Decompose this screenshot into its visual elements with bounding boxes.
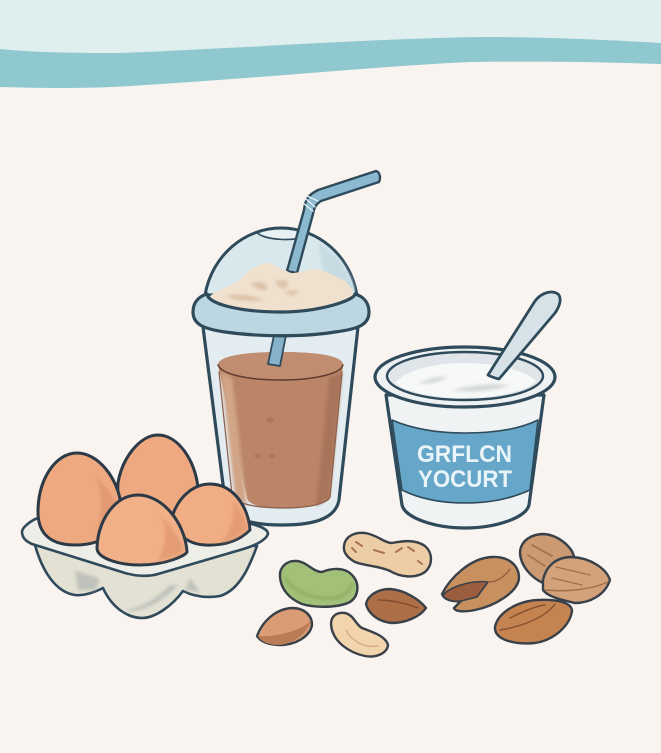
pistachio xyxy=(442,557,519,611)
yogurt surface xyxy=(395,363,536,398)
tub rim xyxy=(375,347,555,407)
egg carton xyxy=(22,435,268,618)
mixed nuts xyxy=(257,533,610,657)
egg back left xyxy=(38,453,121,545)
peanut xyxy=(344,533,431,576)
left almond xyxy=(257,608,312,645)
label text xyxy=(417,441,512,493)
milkshake cup xyxy=(193,171,380,525)
back almond xyxy=(520,534,574,583)
egg right xyxy=(173,484,250,545)
header wave xyxy=(0,0,661,88)
dome lid xyxy=(205,228,357,295)
lower straw xyxy=(268,335,286,366)
blue label xyxy=(392,420,538,503)
label text: GRFLCN xyxy=(417,441,512,468)
green bean xyxy=(280,561,357,607)
tray top xyxy=(22,518,268,576)
upper straw xyxy=(287,171,380,273)
cashew xyxy=(331,613,388,657)
yogurt tub body xyxy=(386,395,544,528)
spoon xyxy=(488,292,560,379)
label text: YOCURT xyxy=(418,466,512,493)
whipped topping xyxy=(208,263,354,312)
shake liquid xyxy=(218,352,343,508)
lid rim xyxy=(193,294,369,336)
cup body xyxy=(203,327,358,525)
brown almond xyxy=(366,589,426,623)
egg front xyxy=(97,495,187,565)
bottom almond xyxy=(495,600,572,643)
egg back right xyxy=(118,435,198,535)
front almond xyxy=(543,557,610,603)
yogurt cup xyxy=(375,292,560,528)
tray cups xyxy=(35,540,257,618)
